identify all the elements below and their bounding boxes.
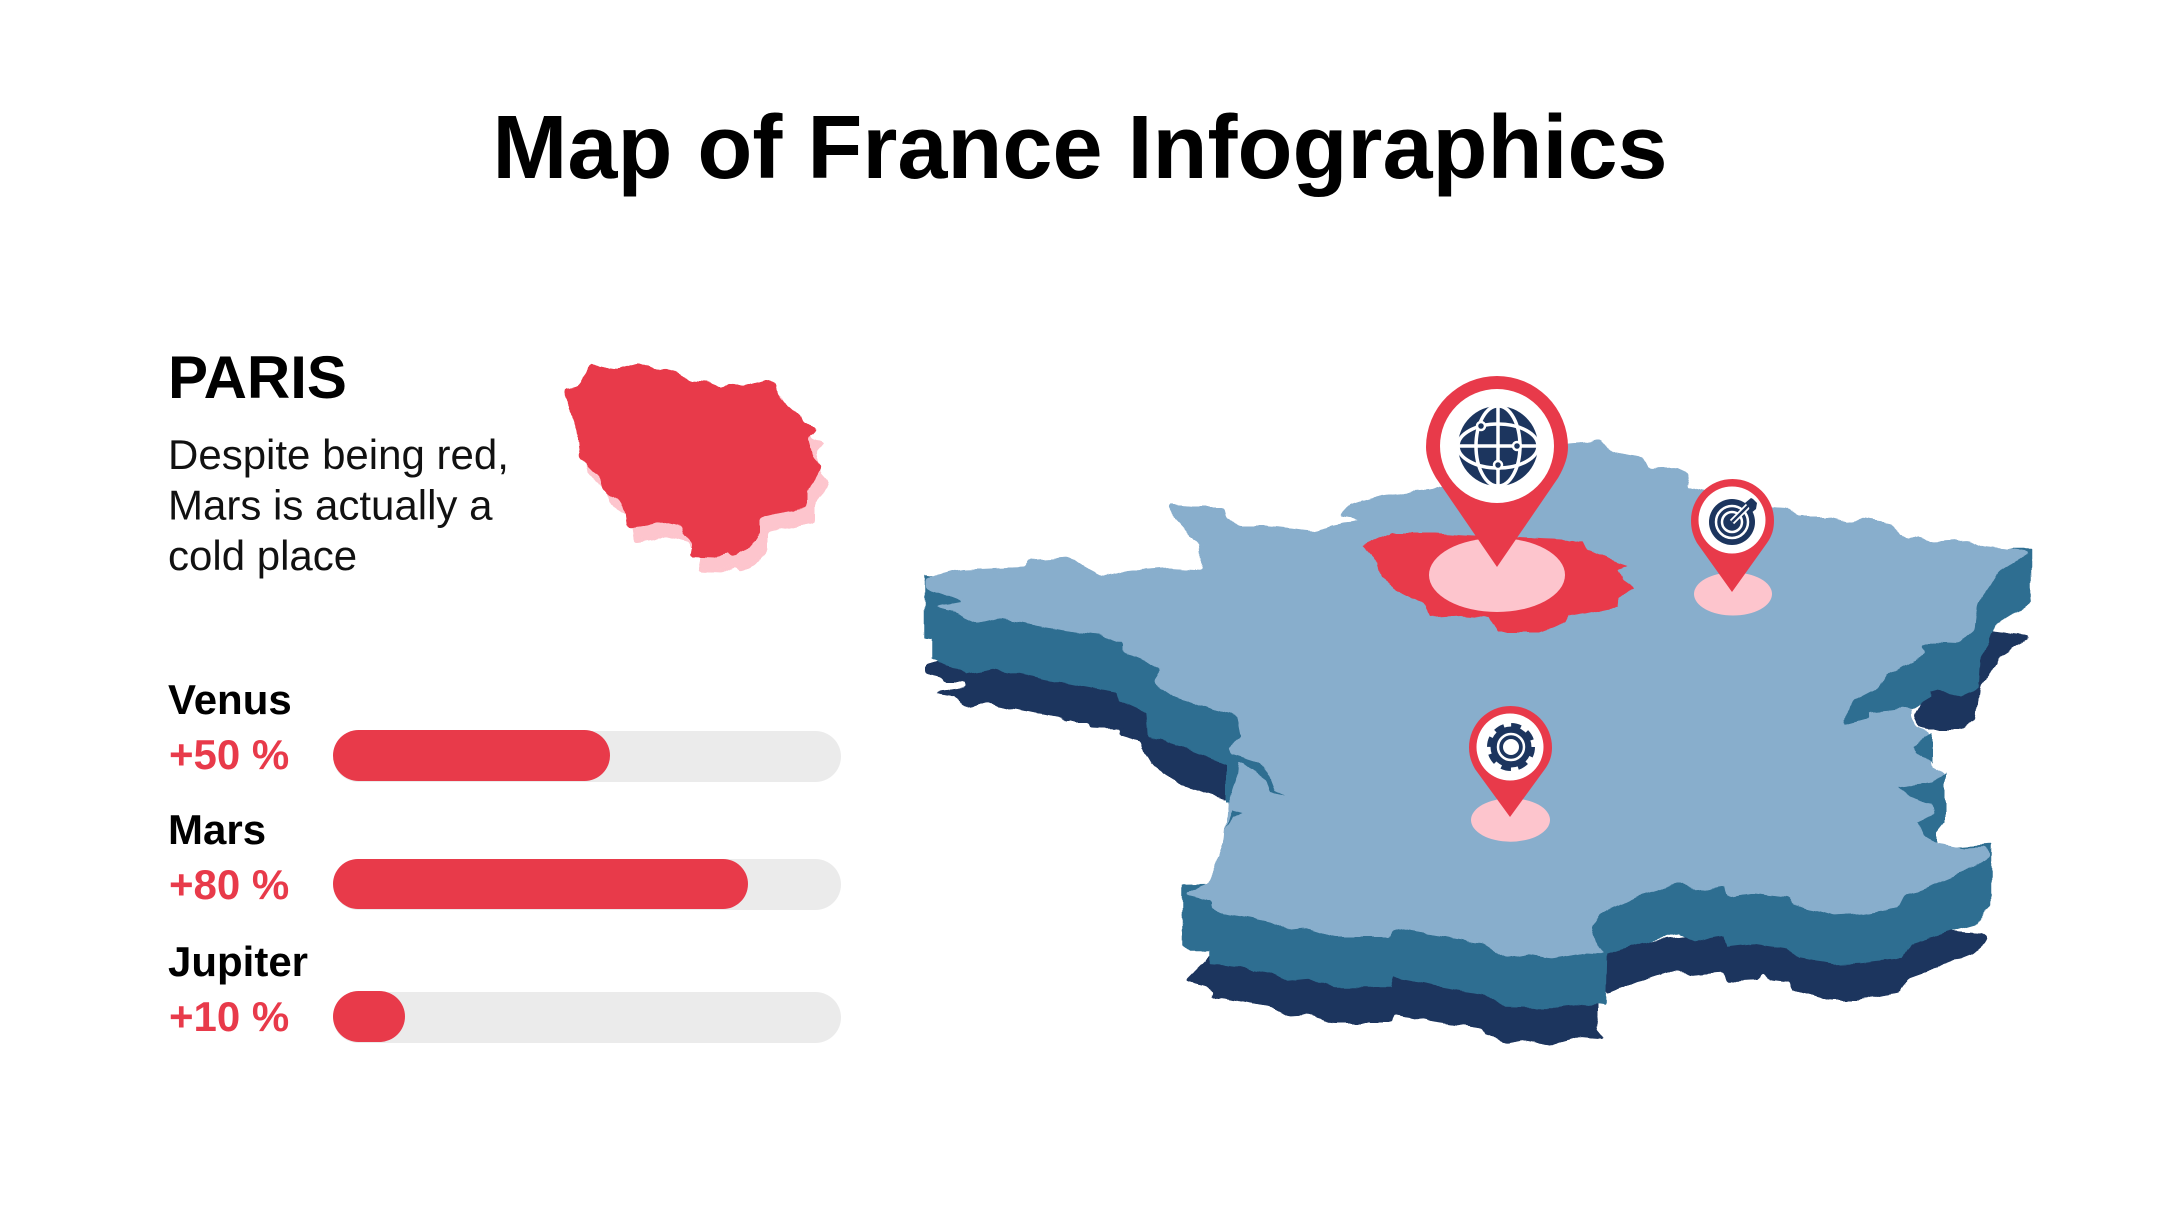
map layer: top surface [925,439,2030,958]
bar row: Jupiter: +10 % [169,993,289,1040]
text block: description: cold place [168,532,357,579]
bar chart: planets [168,676,841,1043]
map highlight: Paris region [1362,532,1633,633]
map pin: gear [1469,706,1552,842]
map pin: globe [1426,376,1568,612]
heading: Paris: PARIS [168,344,347,411]
bar row: Venus [168,676,841,782]
icon: Paris region mini map [562,362,830,573]
icon: globe [1458,406,1538,486]
bar row: Mars [168,806,841,910]
map detail: estuaries and river inlets [1226,733,1945,843]
bar row: Venus: +50 % [169,731,289,778]
map layer: mid side [925,550,2030,1008]
bar row: Mars: +80 % [169,861,289,908]
bar row: Jupiter: Jupiter [168,938,308,985]
panel: Paris description [168,344,509,579]
icon: target with arrow [1709,498,1757,545]
text block: description: Despite being red, [168,431,509,478]
text block: description: Mars is actually a [168,482,493,528]
bar row: Venus: Venus [168,676,292,723]
icon: gear [1490,726,1532,768]
map layer: dark base [925,630,2030,1045]
bar row: Jupiter [168,938,841,1043]
map: isometric France [925,439,2030,1045]
bar row: Mars: Mars [168,806,266,853]
title: Map of France Infographics [492,98,1668,198]
map pin: target [1691,479,1774,616]
